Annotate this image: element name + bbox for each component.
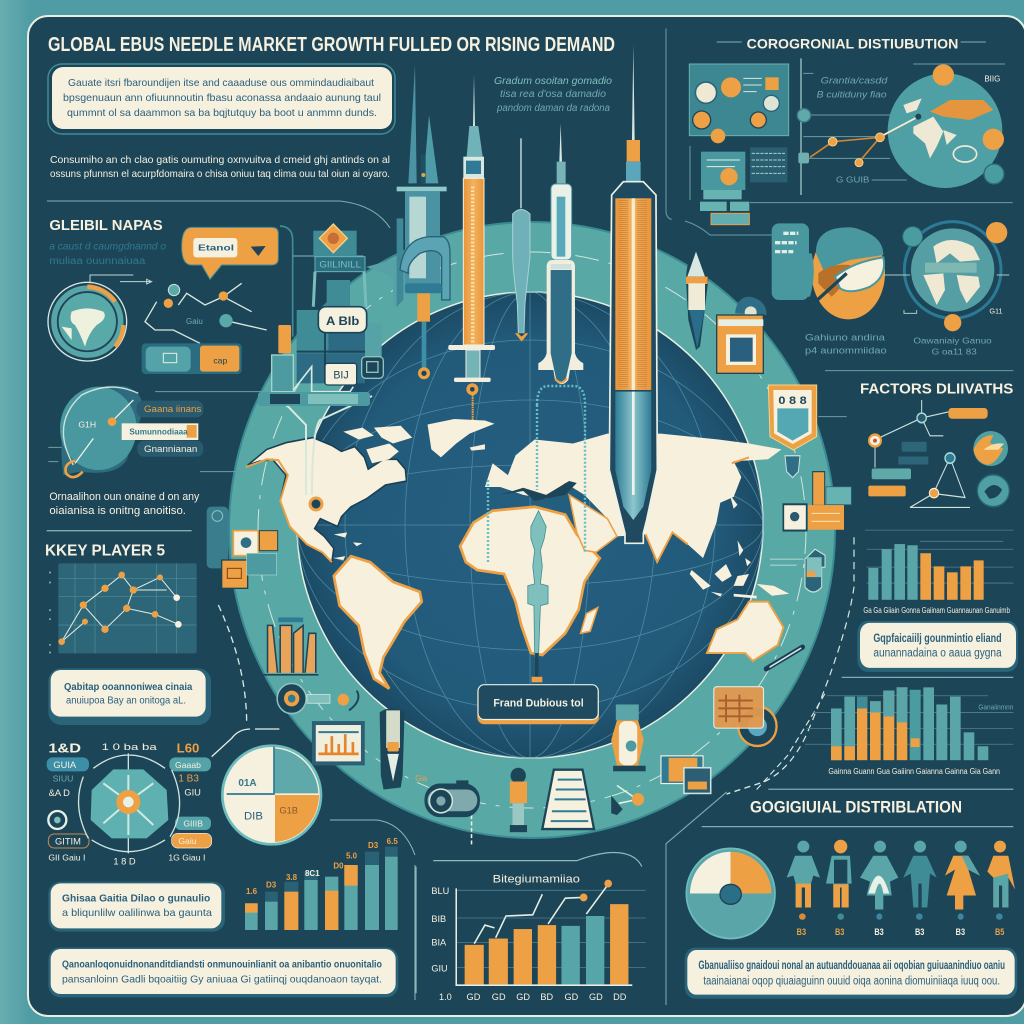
y labels: GIU [431, 963, 448, 973]
pie chart [222, 746, 321, 844]
subtext: muliaa ouunnaiuaa [49, 256, 146, 267]
radial gauge: GII Gaiu I [48, 853, 85, 863]
x labels: GD [516, 992, 530, 1002]
callout frame [280, 226, 293, 337]
greenland [428, 419, 494, 457]
radial gauge: GITIM [55, 837, 81, 847]
intro paragraph [50, 154, 390, 180]
teal wedge behind syringe [366, 252, 420, 308]
pill three [137, 441, 203, 457]
x labels: GD [589, 992, 603, 1002]
heading: GOGIGIUIAL DISTRIBLATION [750, 798, 962, 817]
ring dashed guide [258, 252, 806, 808]
overlapping panel icon [714, 687, 777, 746]
intro paragraph: ossuns pfunnsn el acurpfdomaira o chisa oniuu taq clima ouu tal oiun ai oyaro. [50, 168, 390, 180]
radial gauge: 1&D [48, 741, 81, 755]
dashed guide [727, 537, 854, 794]
lower left callout one [48, 882, 225, 932]
trend diagnosis label [477, 685, 599, 724]
intro callout: bpsgenuaun ann ofiuunnoutin fbasu aconassa andaaio aunung taul [63, 92, 381, 104]
second column chart [805, 687, 1013, 776]
monitor chart [312, 721, 365, 765]
figure markers: B5 [995, 927, 1005, 937]
syringe 2 [448, 75, 495, 420]
lower left callout one: a bliqunlilw oalilinwa ba gaunta [62, 908, 213, 919]
callout: anuiupoa Bay an onitoga aL. [66, 695, 186, 706]
radial gauge: &A D [49, 788, 70, 798]
side icons [770, 456, 851, 592]
africa needle probe [528, 511, 548, 682]
globe with line chart [810, 64, 1005, 188]
y labels: BIA [431, 938, 447, 948]
syringe 1 [397, 65, 450, 379]
bottom center chart [416, 853, 646, 1002]
probe base [532, 677, 542, 682]
tool icon [380, 708, 405, 789]
global maps section [48, 218, 383, 392]
syringe top teal text: tisa rea d'osa damadio [500, 89, 606, 100]
south america [334, 556, 422, 689]
radial gauge: 1G Giau I [168, 853, 205, 863]
globe ocean [297, 292, 763, 758]
tower of lab equipment [272, 224, 383, 392]
geographic distribution top right [666, 28, 1014, 450]
asia coast [646, 457, 749, 562]
radial gauge: 1 0 ba ba [102, 742, 157, 752]
side texts [797, 58, 907, 195]
cards icon [661, 756, 711, 793]
connector [293, 254, 363, 257]
radial gauge: Gaaab [175, 760, 201, 770]
eurasia [485, 434, 782, 562]
network diagram [145, 283, 267, 343]
donut captions: p4 aunommiidao [805, 345, 887, 355]
pill two [122, 423, 198, 440]
segmented donut chart [772, 223, 885, 319]
stacked bar chart: 5.0 [346, 851, 358, 860]
syringe top teal text: pandom daman da radona [496, 103, 610, 114]
lens icon [277, 684, 358, 714]
figure markers: B3 [874, 927, 884, 937]
globe captions [913, 335, 992, 356]
mediterranean [500, 481, 577, 501]
arabia [569, 495, 617, 552]
stacked bar chart [245, 820, 415, 1000]
x labels: GD [467, 992, 481, 1002]
side texts: Grantia/casdd [821, 75, 889, 85]
stacked bar chart: 8C1 [305, 869, 320, 878]
dial disc [60, 387, 137, 470]
stacked bar chart: D3 [266, 880, 277, 889]
north america coast [246, 459, 332, 562]
y labels: BLU [431, 886, 449, 896]
world map continents [246, 419, 803, 689]
radial gauge: 1 8 D [113, 857, 136, 867]
radial gauge: SIUU [53, 774, 73, 784]
paragraph: oiaianisa is onitng anoitiso. [49, 505, 186, 517]
bottle icon [611, 704, 646, 771]
gauge diagram [48, 386, 263, 517]
heading: KKEY PLAYER 5 [45, 543, 165, 560]
device icon [717, 297, 767, 373]
trend points [580, 880, 612, 901]
title: GLOBAL EBUS NEEDLE MARKET GROWTH FULLED OR RISING DEMAND [48, 34, 615, 56]
radial gauge: GIIIB [183, 819, 203, 829]
iceland and caribbean [334, 444, 485, 560]
globe captions: Oawaniaiy Ganuo [913, 335, 992, 345]
axis [456, 888, 632, 985]
leader [818, 415, 847, 418]
network diagram: Gaiu [186, 317, 203, 326]
pie chart: G1B [279, 805, 298, 815]
pie chart: 01A [238, 778, 257, 789]
tower of lab equipment: BIJ [333, 370, 349, 382]
central globe [229, 222, 835, 838]
callout: aunannadaina o aaua gygna [873, 647, 1002, 660]
globe captions: G oa11 83 [932, 347, 977, 356]
x labels: GD [565, 992, 579, 1002]
southeast asia islands [690, 495, 789, 598]
divider [666, 677, 1013, 1005]
line chart [50, 563, 197, 653]
pen highlight [770, 648, 801, 667]
side texts: B cuitiduny fiao [817, 89, 887, 99]
needle pen icon [686, 247, 709, 350]
stacked bar chart: 6.5 [387, 837, 398, 846]
stacked bar chart: 1.6 [246, 887, 258, 896]
subtext [49, 241, 166, 267]
new zealand pen [766, 647, 803, 669]
syringes group [397, 45, 657, 543]
heading: GLEIBIL NAPAS [49, 218, 163, 234]
outer frame [666, 28, 672, 219]
figure markers: B3 [915, 927, 925, 937]
syringe 5 [609, 45, 657, 543]
north america [248, 438, 406, 562]
figure markers: B3 [797, 927, 806, 937]
small report cards [690, 146, 787, 225]
second column chart: Gainna Guann Gua Gaiiinn Gaianna Gainna Gia Gann [828, 767, 1000, 776]
column chart: Ga Ga Giiain Gonna Gaiinam Guannaunan Ganuimb [863, 605, 1010, 615]
intro callout [48, 64, 395, 134]
bottom left callout: pansanloinn Gadli bqoaitiig Gy aniuaa Gi gatiinqj ouqdanoaon tayqat. [62, 974, 382, 985]
radial gauge: GUIA [53, 760, 77, 770]
divider [47, 529, 192, 533]
madagascar [581, 608, 598, 633]
stacked bar chart: D3 [368, 841, 379, 850]
intro callout: Gauate itsri fbaroundijen itse and caaaduse ous ommindaudiaibaut [68, 77, 374, 89]
tower of lab equipment: A BIb [326, 314, 359, 328]
legend box: cap [213, 355, 227, 365]
key players section [45, 531, 415, 1000]
intro paragraph: Consumiho an ch clao gatis oumuting oxnvuitva d cmeid ghj antinds on al [50, 154, 390, 166]
shield icon [768, 385, 817, 450]
x labels [439, 992, 627, 1002]
map funnel and pin [258, 392, 372, 510]
syringe 4 [538, 123, 583, 384]
callout [48, 668, 211, 725]
side texts: G GUIB [836, 175, 869, 184]
dial label: G1H [78, 419, 96, 429]
globe grid [297, 292, 763, 758]
right column factors [666, 400, 1018, 1005]
radial gauge: 1 B3 [178, 774, 199, 785]
y labels [431, 886, 449, 973]
legend box [142, 343, 242, 374]
dial dot [108, 417, 116, 426]
bottom right callout [685, 948, 1017, 999]
radial gauge [47, 741, 212, 867]
shield icon: 0 8 8 [778, 395, 807, 407]
paragraph: Ornaalihon oun onaine d on any [49, 491, 200, 503]
document icon [542, 770, 594, 829]
syringe top teal text [494, 76, 612, 114]
heading: FACTORS DLIIVATHS [860, 381, 1014, 397]
world globe icon: G11 [989, 306, 1003, 315]
orange micro text: Gia [415, 774, 428, 783]
dotted connectors [488, 386, 585, 562]
stacked bar chart: D0 [333, 861, 344, 870]
needle [75, 400, 133, 463]
heading: COROGRONIAL DISTIUBUTION [747, 35, 958, 51]
stacked bar chart: 3.8 [286, 873, 298, 882]
pill one [137, 401, 203, 417]
pill one: Gaana iinans [144, 404, 202, 414]
pointer icon [611, 786, 644, 815]
pill three: Gnannianan [144, 444, 197, 454]
divider [685, 203, 1013, 371]
x labels: GD [492, 992, 506, 1002]
x labels: 1.0 [439, 992, 452, 1002]
trend line [474, 884, 608, 944]
callout: Qabitap ooannoniwea cinaia [64, 682, 193, 693]
orange callout: Etanol [198, 243, 234, 253]
pill two: Sumunnodiaaa [129, 427, 188, 437]
divider curve [47, 201, 390, 228]
leader lines [48, 392, 263, 472]
tower of lab equipment: GIILINILL [319, 260, 361, 270]
bottom left callout [48, 947, 398, 997]
figure markers: B3 [835, 927, 845, 937]
bottom right callout: taainaianai oqop qiuaiaguinn ouuid oiqa aonina diomuiniiaqa iuuq oou. [703, 975, 1000, 988]
figure markers [797, 913, 1005, 937]
syringe top teal text: Gradum osoitan gomadio [494, 76, 612, 87]
probe stem [535, 653, 539, 681]
radial gauge: L60 [177, 741, 199, 755]
dashed guide [218, 605, 247, 723]
factor network [868, 400, 1009, 507]
hook [66, 461, 83, 477]
orange callout [182, 227, 278, 279]
pie chart: DIB [244, 810, 263, 822]
small column chart [263, 617, 318, 675]
paragraph [49, 491, 200, 517]
frame [416, 853, 642, 993]
syringe 3 [513, 138, 530, 342]
y labels: BIB [431, 914, 446, 924]
figure icon [510, 768, 527, 832]
scanner icon [424, 780, 480, 847]
connector [212, 729, 279, 757]
globe ring bottom icons [263, 617, 826, 847]
arctic islands [343, 426, 412, 463]
bottom left callout: Qanoanloqonuidnonanditdiandsti onmunouinlianit oa anibantio onuonitalio [62, 960, 382, 971]
icon stack left of globe [207, 507, 278, 588]
chart title: Bitegiumamiiao [493, 873, 580, 885]
callout: Gqpfaicaiilj gounmintio eliand [873, 632, 1002, 645]
radial gauge: GIU [184, 788, 201, 798]
radial gauge: Gaiu [178, 836, 197, 846]
world globe icon [883, 222, 1009, 331]
africa [460, 507, 600, 655]
x labels: BD [540, 992, 553, 1002]
bars [465, 904, 628, 984]
australia [707, 602, 783, 661]
dial ring [63, 387, 138, 465]
distribution pie [686, 849, 775, 938]
dashed label [757, 693, 826, 789]
x labels: DD [613, 992, 627, 1002]
second column chart: Ganaiinmnn [978, 704, 1013, 712]
intro callout: qummnt ol sa daammon sa ba bqjtutquy ba boot u anmmn dunds. [67, 107, 377, 119]
globe with line chart: BIIG [984, 75, 1000, 84]
grid [456, 890, 646, 967]
column chart [863, 530, 1013, 615]
globe icon [48, 282, 127, 361]
lower left callout one: Ghisaa Gaitia Dilao o gunaulio [62, 894, 210, 905]
arrows [90, 275, 152, 284]
figure markers: B3 [956, 927, 965, 937]
callout [857, 621, 1018, 672]
donut captions [805, 333, 887, 355]
globe outer ring [229, 222, 835, 838]
subtext: a caust d caumgdnannd o [49, 241, 166, 252]
dashboard card [689, 64, 789, 143]
donut captions: Gahiuno andina [805, 333, 885, 343]
person figures [787, 840, 1015, 909]
trend diagnosis label: Frand Dubious tol [493, 697, 584, 709]
